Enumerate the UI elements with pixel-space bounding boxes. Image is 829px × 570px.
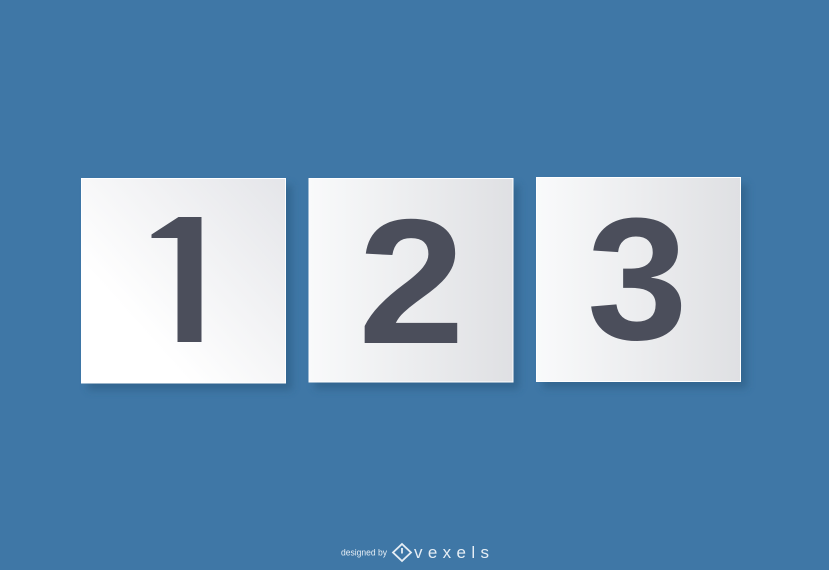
card 2 xyxy=(309,178,519,389)
designed by label: designed by xyxy=(341,548,387,558)
icon: diamond xyxy=(393,544,411,561)
card 1 xyxy=(82,177,292,390)
number 1: 1 xyxy=(135,177,236,381)
card 3 xyxy=(536,178,747,388)
number 3: 3 xyxy=(587,181,688,376)
footer logo xyxy=(341,543,489,562)
number 2: 2 xyxy=(358,183,465,381)
vexels wordmark: vexels xyxy=(414,543,489,562)
